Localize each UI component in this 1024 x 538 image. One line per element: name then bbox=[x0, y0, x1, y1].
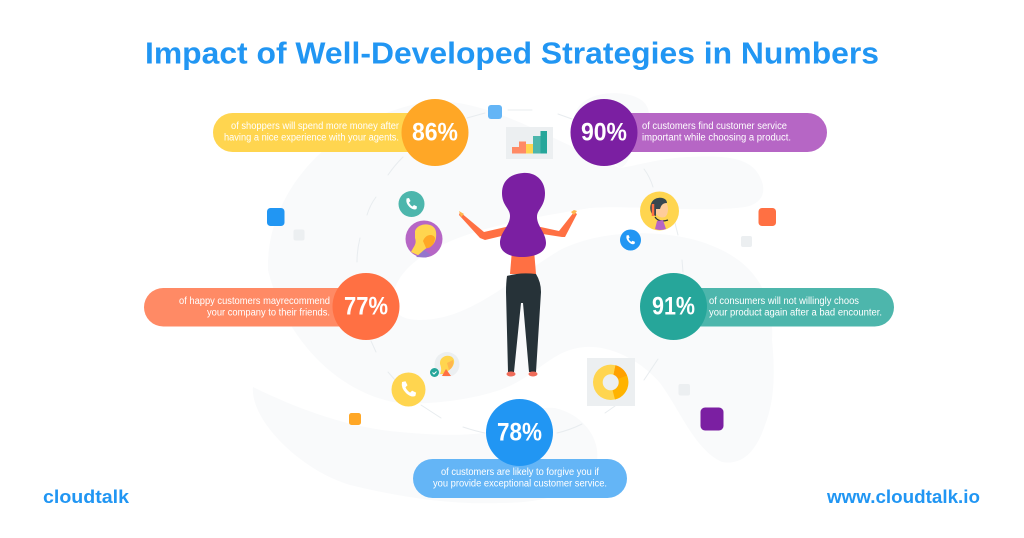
pill: 90% bbox=[600, 113, 827, 152]
logo: cloudtalk: cloudtalk bbox=[43, 487, 130, 507]
text: 90% description: of customers find customer service bbox=[642, 121, 787, 132]
circle: 78% bbox=[486, 399, 553, 466]
title: Impact of Well-Developed Strategies in Numbers bbox=[145, 36, 879, 70]
icon: small avatar with check bbox=[430, 352, 460, 377]
icon: teal phone bbox=[398, 191, 424, 217]
background blobs bbox=[253, 93, 774, 503]
text: 77% description: of happy customers mayrecommend bbox=[179, 296, 330, 307]
panel: 86% stat bbox=[213, 99, 468, 166]
pill: 78% bbox=[413, 459, 627, 498]
trousers bbox=[506, 273, 541, 372]
text: 78% description: you provide exceptional customer service. bbox=[433, 478, 607, 490]
text: 86% description bbox=[224, 121, 400, 144]
icon: blue phone bbox=[620, 230, 641, 250]
decorative square: blue bbox=[267, 208, 284, 226]
text: 86% description: having a nice experience with your agents. bbox=[224, 132, 399, 144]
circle: 77% bbox=[332, 273, 400, 340]
shoes bbox=[506, 372, 538, 376]
torso bbox=[510, 250, 536, 274]
text: 86% description: of shoppers will spend more money after bbox=[231, 121, 400, 132]
decorative square: light blue bbox=[488, 105, 502, 119]
url: www.cloudtalk.io: www.cloudtalk.io bbox=[826, 487, 980, 507]
decorative square: small orange bbox=[349, 413, 361, 425]
number: 91%: 91% bbox=[652, 292, 695, 320]
figure: woman seen from behind bbox=[459, 173, 577, 376]
hands bbox=[459, 210, 577, 217]
icon: yellow phone bbox=[392, 372, 426, 406]
number: 90%: 90% bbox=[581, 118, 627, 146]
text: 77% description: your company to their friends. bbox=[207, 308, 330, 318]
arms bbox=[459, 212, 577, 240]
decorative square: grey right bbox=[741, 236, 752, 247]
hair bbox=[500, 173, 546, 257]
number: 77%: 77% bbox=[344, 292, 388, 320]
circle: 90% bbox=[570, 99, 638, 166]
text: 78% description: of customers are likely to forgive you if bbox=[441, 467, 599, 478]
text: 91% description: of consumers will not willingly choos bbox=[709, 296, 859, 307]
text: 91% description: your product again after a bad encounter. bbox=[709, 308, 882, 318]
text: 90% description bbox=[642, 121, 791, 144]
connector dashes bbox=[357, 110, 683, 433]
decorative square: purple bbox=[700, 408, 724, 430]
number: 78%: 78% bbox=[497, 418, 542, 446]
panel: 78% stat bbox=[413, 399, 627, 498]
text: 78% description bbox=[433, 467, 607, 490]
text: 91% description bbox=[709, 296, 882, 318]
panel: 91% stat bbox=[640, 273, 894, 340]
icon: woman avatar bbox=[406, 220, 442, 258]
icon: headset agent avatar bbox=[640, 192, 679, 230]
pill: 77% bbox=[144, 288, 369, 326]
text: 77% description bbox=[179, 296, 330, 318]
circle: 91% bbox=[640, 273, 707, 340]
pill: 86% bbox=[213, 113, 438, 152]
number: 86%: 86% bbox=[412, 118, 458, 146]
decorative square: grey lower bbox=[678, 384, 690, 396]
text: 90% description: important while choosing a product. bbox=[642, 132, 791, 144]
icon: donut chart bbox=[587, 358, 635, 406]
panel: 90% stat bbox=[570, 99, 827, 166]
decorative square: orange bbox=[758, 208, 776, 226]
panel: 77% stat bbox=[144, 273, 400, 340]
circle: 86% bbox=[402, 99, 468, 166]
pill: 91% bbox=[670, 288, 894, 326]
icon: bar chart bbox=[506, 127, 553, 159]
decorative square: grey left bbox=[294, 230, 304, 240]
